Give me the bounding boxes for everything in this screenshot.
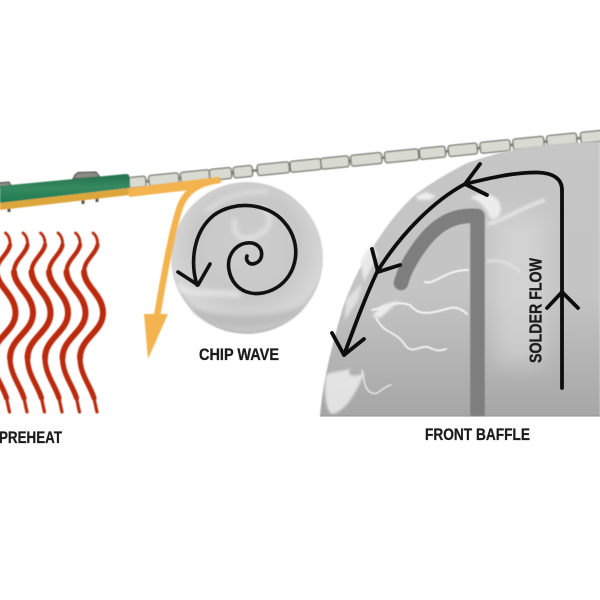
main flow path [344,172,562,388]
board component left [0,182,12,188]
PCB board [0,172,130,212]
solder coat under board [0,188,130,210]
dome right lit section [495,215,545,365]
chip wave highlights [177,192,270,295]
solder flow arrows [332,164,578,388]
dome edge glints [416,192,436,200]
dome body [320,142,600,416]
conveyor chain [128,126,600,189]
board component top [73,172,100,179]
solder run-off arrow [129,177,222,359]
chip wave bottom shade [190,305,305,328]
mid arrowhead [372,249,400,272]
preheat label: PREHEAT [0,429,62,447]
solder flow label: SOLDER FLOW [526,258,546,363]
green board [0,174,130,203]
lower arrowhead [332,333,364,355]
front baffle dome [320,142,600,416]
up arrowhead [547,292,578,308]
dome flow highlights [362,270,468,394]
baffle plate [394,216,478,416]
chip wave [171,182,323,334]
preheat heat waves [0,233,103,412]
top arrowhead [465,164,487,195]
pins [8,196,98,212]
front baffle label: FRONT BAFFLE [425,426,530,444]
chip wave spiral arrow [178,205,296,294]
bottom edge [320,415,600,417]
chip wave solder ball [171,182,323,334]
chip wave label: CHIP WAVE [199,346,279,364]
